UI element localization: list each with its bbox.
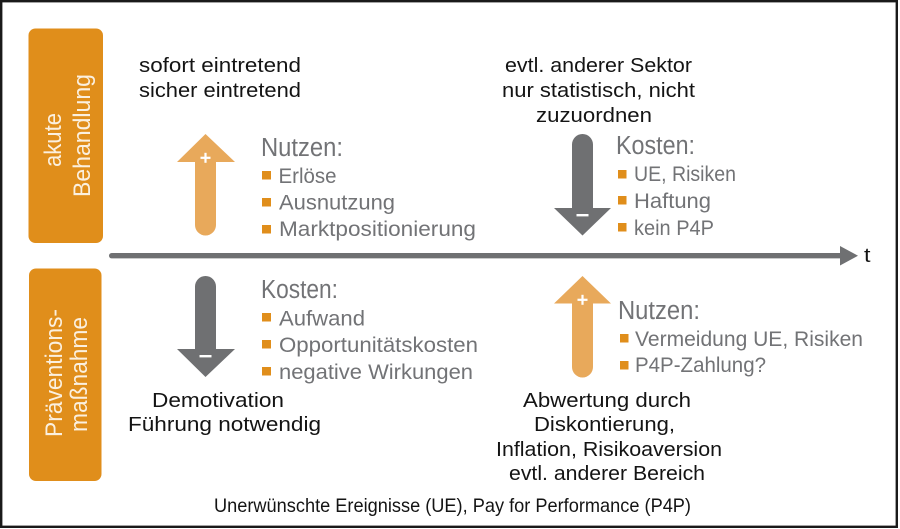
text: bottom right notes: Diskontierung, [534, 413, 675, 436]
text: bottom left notes: Führung notwendig [128, 413, 321, 436]
list: Kosten bottom: Aufwand [279, 308, 365, 330]
text: bottom right notes: Inflation, Risikoaversion [496, 438, 722, 461]
list: Kosten bottom: negative Wirkungen [279, 361, 473, 384]
list: Nutzen bottom: Vermeidung UE, Risiken [635, 328, 863, 351]
list: Kosten bottom: Opportunitätskosten [279, 334, 478, 357]
time axis arrow [109, 245, 871, 267]
panel: Präventionsmaßnahme [29, 268, 102, 481]
panel: akute Behandlung: Behandlung [69, 74, 96, 197]
list: Nutzen top: Erlöse [278, 165, 336, 188]
list: Kosten bottom: Kosten: [261, 276, 338, 304]
list: Kosten top: Haftung [634, 190, 711, 213]
list: Kosten bottom [261, 276, 478, 384]
list: Kosten top: Kosten: [616, 132, 695, 160]
list: Nutzen bottom [618, 297, 863, 377]
icon: plus arrow top left [177, 134, 235, 236]
list: Nutzen bottom: P4P-Zahlung? [635, 354, 766, 377]
text: bottom right notes [496, 389, 722, 485]
panel: akute Behandlung [28, 28, 103, 243]
footnote: Unerwünschte Ereignisse (UE), Pay for Performance (P4P) [214, 495, 691, 517]
panel: Präventionsmaßnahme: Präventions- [41, 309, 68, 437]
text: top right notes: nur statistisch, nicht [502, 79, 695, 102]
list: Nutzen top [261, 134, 476, 241]
list: Nutzen top: Nutzen: [261, 134, 343, 162]
text: bottom left notes: Demotivation [152, 389, 284, 412]
list: Nutzen bottom: Nutzen: [618, 297, 700, 325]
text: top right notes: evtl. anderer Sektor [505, 54, 692, 77]
time axis arrow: t [864, 245, 871, 267]
panel: akute Behandlung: akute [40, 113, 67, 167]
text: top left notes: sicher eintretend [139, 79, 301, 102]
icon: minus arrow bottom left [177, 276, 235, 377]
text: top right notes [502, 54, 695, 127]
list: Nutzen top: Marktpositionierung [279, 218, 476, 241]
text: bottom right notes: Abwertung durch [523, 389, 691, 412]
list: Kosten top [616, 132, 736, 240]
panel: Präventionsmaßnahme: maßnahme [66, 317, 93, 432]
text: top right notes: zuzuordnen [536, 104, 652, 127]
list: Kosten top: kein P4P [634, 217, 714, 240]
list: Kosten top: UE, Risiken [634, 163, 736, 186]
list: Nutzen top: Ausnutzung [279, 192, 395, 214]
text: bottom left notes [128, 389, 321, 436]
text: top left notes [139, 54, 301, 102]
text: bottom right notes: evtl. anderer Bereich [509, 462, 705, 485]
icon: plus arrow bottom right [554, 276, 611, 378]
text: top left notes: sofort eintretend [139, 54, 301, 77]
icon: minus arrow top right [554, 134, 611, 236]
